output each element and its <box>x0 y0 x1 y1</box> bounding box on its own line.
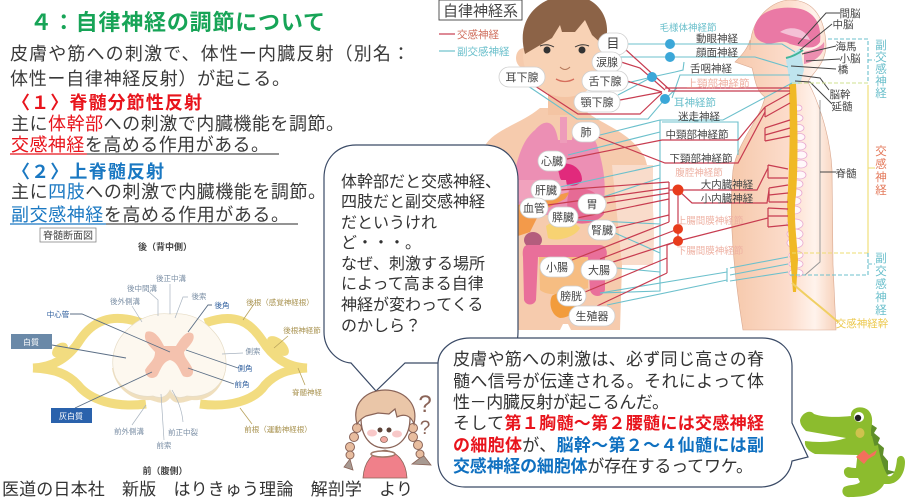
cord base <box>112 368 226 403</box>
gray matter <box>145 331 194 378</box>
organ label pills: 肝臓 <box>535 184 557 197</box>
organs <box>515 117 607 330</box>
icon: crocodile <box>800 407 905 497</box>
labels: anatomy: 後角 <box>214 300 230 310</box>
intro text: 皮膚や筋への刺激で、体性ー内臓反射（別名： <box>10 44 410 64</box>
organ label pills: 舌下腺 <box>588 74 622 88</box>
label box: white matter <box>11 334 52 349</box>
organ label pills <box>499 33 628 326</box>
organ label pills: 膵臓 <box>552 211 574 224</box>
vertical labels: 経 <box>875 87 887 100</box>
speech bubble: girl: のかしら？ <box>341 318 421 335</box>
nerve name labels: 耳神経節 <box>674 96 716 109</box>
label box: white matter: 白質 <box>23 337 39 347</box>
speech bubble: girl: 体幹部だと交感神経、 <box>341 173 501 191</box>
organ label pills: 腎臓 <box>591 224 613 237</box>
labels: anatomy: 後根神経節 <box>283 325 321 335</box>
nerve name labels: 中脳 <box>832 18 854 31</box>
nerve name labels: 橋 <box>838 63 849 76</box>
brain <box>754 8 824 84</box>
speech bubble: girl: ど・・・。 <box>341 234 421 252</box>
side figure body <box>731 0 836 330</box>
nerve name labels: 迷走神経 <box>678 110 720 123</box>
white matter <box>113 314 226 398</box>
organ label pills: 大腸 <box>588 263 610 277</box>
speech bubble: girl: 神経が変わってくる <box>341 296 483 314</box>
vertical labels: 神 <box>875 170 887 184</box>
section 1: segmental reflex: 〈１〉脊髄分節性反射 <box>12 92 202 113</box>
icon: confused girl: ? <box>420 418 430 439</box>
legend: 副交感神経 <box>457 45 510 58</box>
sympathetic trunk spine <box>787 84 838 322</box>
vertical labels: 感 <box>875 277 887 291</box>
speech bubble: girl <box>324 145 518 391</box>
labels: anatomy: 中心管 <box>47 309 70 319</box>
nerve name labels: 毛様体神経節 <box>659 22 717 34</box>
dorsal root ganglion <box>264 332 292 360</box>
speech bubble: girl: によって高まる自律 <box>341 275 484 293</box>
label box: gray matter <box>51 408 92 423</box>
labels: anatomy: 脊髄神経 <box>292 387 322 397</box>
diagram caption: 脊髄断面図 <box>43 229 93 242</box>
vertical labels: 副 <box>875 252 887 265</box>
vertical labels: 交 <box>875 145 887 158</box>
organ label pills: 心臓 <box>541 155 563 168</box>
dashed brackets <box>790 39 875 275</box>
illustration title: 自律神経系 <box>443 3 518 20</box>
nerve name labels: 交感神経幹 <box>836 317 889 330</box>
autonomic nervous system illustration <box>439 0 889 330</box>
vertical labels <box>875 39 887 317</box>
organ label pills: 生殖器 <box>576 309 608 323</box>
icon: confused girl: ? <box>418 391 432 418</box>
nerve name labels: 小脳 <box>840 53 861 65</box>
speech bubble: girl: だというけれ <box>341 215 437 232</box>
sympathetic red pathways <box>535 49 790 306</box>
speech bubble: girl: なぜ、刺激する場所 <box>341 255 485 273</box>
parasympathetic teal pathways <box>528 44 795 305</box>
nerve name labels <box>659 8 889 330</box>
section 2: supraspinal reflex: 主に四肢への刺激で内臓機能を調節。 <box>11 182 326 202</box>
speech bubble: crocodile: 交感神経の細胞体が存在するってワケ。 <box>453 456 753 476</box>
labels: anatomy: 後根（感覚神経根） <box>246 297 314 307</box>
labels: anatomy: 前角 <box>234 379 250 389</box>
labels: anatomy: 後索 <box>192 291 207 301</box>
labels: anatomy: 後中間溝 <box>127 283 157 293</box>
nerve name labels: 上腸間膜神経節 <box>677 215 743 227</box>
label leaders <box>52 305 238 408</box>
nerve name labels: 脊髄 <box>836 167 857 180</box>
speech bubble: crocodile: 性－内臓反射が起こるんだ。 <box>453 393 669 412</box>
vertical labels: 神 <box>875 74 887 88</box>
nerve name labels: 下頸部神経節 <box>670 152 732 165</box>
organ label pills: 膀胱 <box>560 289 582 303</box>
speech bubble: crocodile: 皮膚や筋への刺激は、必ず同じ高さの脊 <box>453 350 764 369</box>
organ label pills: 耳下腺 <box>506 70 538 84</box>
section 1: segmental reflex: 交感神経を高める作用がある。 <box>11 135 269 155</box>
vertical labels: 交 <box>875 51 887 64</box>
spinal cord cross-section diagram: 前（腹側） <box>142 465 188 476</box>
nerve name labels: 海馬 <box>836 40 856 53</box>
nerve roots <box>33 318 307 405</box>
organ label pills: 胃 <box>586 198 598 211</box>
organ label pills: 小腸 <box>546 261 568 274</box>
labels: anatomy <box>47 273 322 450</box>
intro text: 体性ー自律神経反射）が起こる。 <box>10 69 290 89</box>
title: ４：自律神経の調節について <box>30 10 325 35</box>
organ label pills: 肺 <box>580 126 592 139</box>
nerve name labels: 舌咽神経 <box>690 62 732 75</box>
ganglion dots <box>647 39 684 246</box>
legend <box>439 28 510 58</box>
section 1: segmental reflex: 主に体幹部への刺激で内臓機能を調節。 <box>11 114 344 134</box>
nerve name labels: 顔面神経 <box>696 46 738 59</box>
vertical labels: 経 <box>875 184 887 197</box>
organ label pills: 顎下腺 <box>580 95 614 109</box>
label box: gray matter: 灰白質 <box>59 411 83 421</box>
section 2: supraspinal reflex: 副交感神経を高める作用がある。 <box>11 205 289 225</box>
front figure body <box>470 0 654 330</box>
speech bubble: crocodile <box>438 338 808 487</box>
nerve name labels: 脳幹 <box>830 88 851 101</box>
labels: posterior and anterior headings: 後（背中側） <box>138 241 192 252</box>
vertical labels: 交 <box>875 265 887 278</box>
nerve name labels: 下腸間膜神経節 <box>677 245 743 257</box>
section 2: supraspinal reflex <box>10 161 326 225</box>
speech bubble: crocodile: 髄へ信号が伝達される。それによって体 <box>453 372 764 391</box>
speech bubble: girl: 四肢だと副交感神経 <box>341 193 485 211</box>
labels: anatomy: 前索 <box>156 440 172 450</box>
vertical labels: 神 <box>875 290 887 304</box>
labels: anatomy: 後正中溝 <box>156 273 186 283</box>
nerve name labels: 中頸部神経節 <box>666 128 728 141</box>
speech bubble: crocodile: の細胞体が、脳幹～第２～４仙髄には副 <box>453 435 764 455</box>
source citation: 医道の日本社 新版 はりきゅう理論 解剖学 より <box>2 480 413 499</box>
icon: confused girl <box>344 390 432 478</box>
labels: anatomy: 側索 <box>246 346 261 356</box>
nerve name labels: 上頸部神経節 <box>686 77 750 90</box>
nerve name labels: 大内臓神経 <box>701 178 754 191</box>
vertical labels: 副 <box>875 39 887 52</box>
nerve name labels: 動眼神経 <box>696 32 738 45</box>
vertical labels: 感 <box>875 62 887 76</box>
nerve name labels: 腹腔神経節 <box>675 167 723 179</box>
organ label pills: 血管 <box>523 201 545 215</box>
section 2: supraspinal reflex: 〈２〉上脊髄反射 <box>12 161 164 182</box>
labels: anatomy: 前根（運動神経根） <box>244 424 312 434</box>
vertical labels: 感 <box>875 157 887 171</box>
vertical labels: 経 <box>875 304 887 317</box>
labels: anatomy: 前外側溝 <box>114 426 144 436</box>
legend: 交感神経 <box>457 28 499 41</box>
speech bubble: crocodile: そして第１胸髄～第２腰髄には交感神経 <box>453 413 764 433</box>
intro text <box>10 44 410 89</box>
nerve name labels: 小内臓神経 <box>701 192 754 205</box>
spine and brain leaders <box>791 13 840 275</box>
labels: anatomy: 側角 <box>238 363 252 373</box>
labels: anatomy: 後外側溝 <box>110 296 140 306</box>
organ label pills: 目 <box>606 36 620 51</box>
nerve name labels: 延髄 <box>832 100 853 113</box>
spinal cord cross-section diagram <box>11 228 322 476</box>
labels: anatomy: 前正中裂 <box>168 427 198 437</box>
nerve name labels: 間脳 <box>840 8 861 20</box>
section 1: segmental reflex <box>10 92 344 155</box>
organ label pills: 涙腺 <box>596 55 618 69</box>
